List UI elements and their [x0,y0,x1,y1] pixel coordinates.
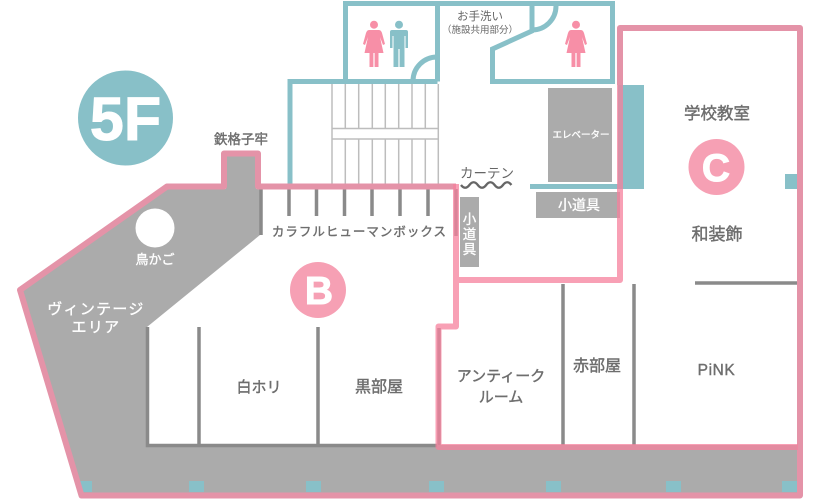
elevator [548,88,612,182]
floor badge 5F: 5F [90,85,161,153]
label: vintage area: エリア [72,319,120,336]
zone badge B [290,262,346,318]
label: PiNK: PiNK [698,362,735,379]
label: antique room: ルーム [479,389,523,406]
storage: props bottom centre: 小道具 [558,197,600,213]
icon: woman right [565,21,587,67]
storage: props vertical [460,197,479,267]
label: antique room [457,368,545,406]
label: antique room: アンティーク [457,368,545,385]
zone badge C [688,139,744,195]
label: red room: 赤部屋 [573,357,621,375]
label: hand washing: お手洗い [457,9,503,23]
storage: props vertical: 具 [463,242,476,257]
storage: props vertical: 小 [463,212,477,227]
storage: props vertical: 道 [463,227,477,242]
elevator: エレベーター [552,130,610,141]
inner gray partition walls [148,189,797,446]
storage: props bottom centre [536,192,620,218]
icon: birdcage circle [136,208,174,248]
icon: man [390,21,408,67]
label: black room: 黒部屋 [355,378,403,396]
label: vintage area: ヴィンテージ [47,301,145,318]
label: hand washing [442,9,518,36]
zone badge C: C [702,147,730,190]
label: birdcage: 鳥かご [135,252,175,267]
label: school classroom: 学校教室 [684,104,750,123]
icon: woman left [363,21,385,67]
zone badge B: B [305,270,333,313]
label: iron lattice cell: 鉄格子牢 [214,132,268,147]
teal column beside elevator [530,85,644,189]
icon: curtain wave [461,182,511,188]
label: hand washing: （施設共用部分） [442,24,518,36]
pink outline: translucent inner walls [438,85,798,447]
label: white room: 白ホリ [236,379,282,396]
teal pillars [80,174,797,492]
teal restroom and stair walls [290,4,612,186]
label: kimono accessories: 和装飾 [692,225,742,244]
label: colorful human box: カラフルヒューマンボックス [272,225,447,239]
label: vintage area [47,301,145,336]
label: curtain: カーテン [460,166,514,181]
gray corridor area [22,156,800,494]
stairs [332,84,438,184]
floor badge 5F [78,70,173,166]
